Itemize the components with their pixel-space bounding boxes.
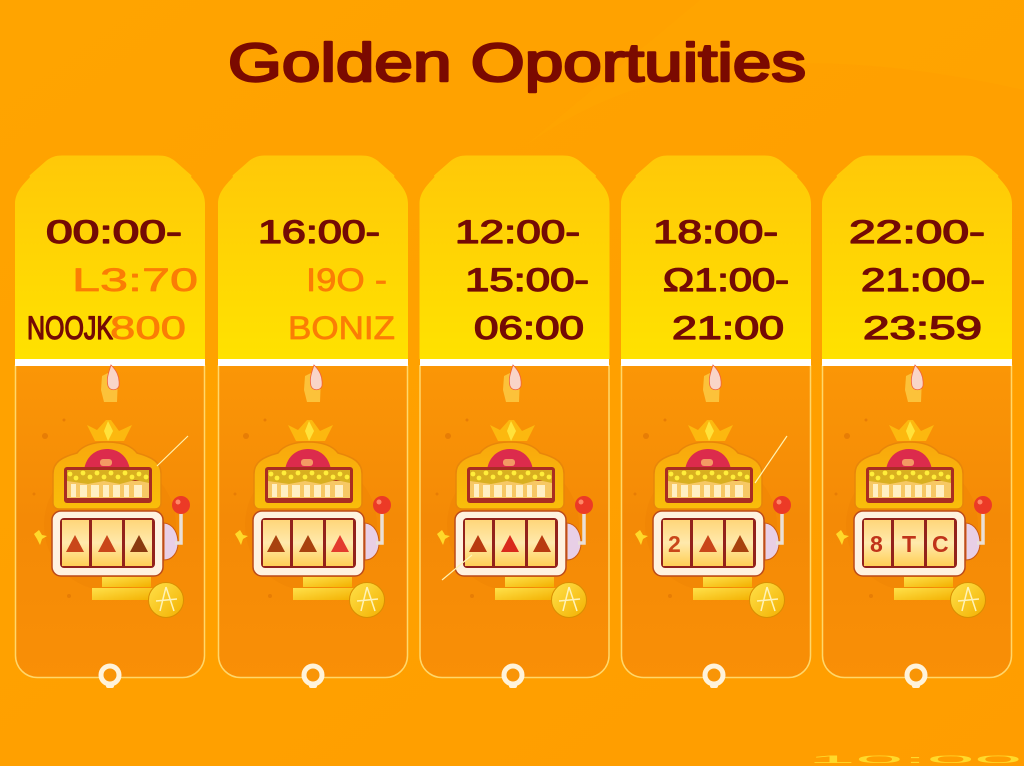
card 1 body: [16, 365, 204, 678]
card 1 ring: [101, 666, 119, 688]
card 2 time text: [258, 214, 395, 346]
card 3 time text: [455, 214, 589, 346]
card 2 time text: BONIZ: [288, 310, 395, 346]
card 4 time text: [653, 214, 789, 346]
card 1 time text: L3:70: [72, 262, 198, 298]
card 4 time text: Ω1:00-: [663, 262, 789, 298]
card 5 slot machine: T: [902, 531, 916, 557]
card 5 time text: 22:00-: [849, 214, 985, 250]
card 3 time text: 15:00-: [465, 262, 589, 298]
card 2 header: [218, 156, 408, 359]
card 3 time text: 12:00-: [455, 214, 580, 250]
card 3 header: [420, 156, 610, 359]
card 2 slot machine: [234, 418, 391, 618]
title: Golden Oportuities: [228, 33, 806, 93]
card 4 slot machine: 2: [668, 531, 681, 557]
card 2 time text: I9O -: [306, 262, 387, 298]
card 5 time text: [849, 214, 985, 346]
card 5 slot machine: C: [932, 531, 949, 557]
panel: time slot 4: [621, 156, 811, 688]
card 1 slot machine: [32, 418, 190, 618]
card 5 slot machine: 8: [870, 531, 883, 557]
card 5 gem: [905, 365, 923, 402]
card 3 body: [420, 365, 609, 678]
card 3 ring: [504, 666, 522, 688]
card 4 time text: 21:00: [672, 310, 784, 346]
card 4 slot machine: [634, 418, 791, 618]
card 2 ring: [304, 666, 322, 688]
card 3 divider: [420, 359, 609, 366]
card 1 header: [15, 156, 205, 359]
panel: time slot 2: [218, 156, 408, 688]
footer text: 10:00: [808, 754, 1022, 766]
card 5 divider: [822, 359, 1012, 366]
card 2 divider: [218, 359, 408, 366]
card 1 time text: 800: [110, 310, 186, 346]
panel: time slot 1: [15, 156, 205, 688]
card 3 gem: [503, 365, 521, 402]
panel: time slot 5: [822, 156, 1012, 688]
card 2 gem: [304, 365, 322, 402]
card 5 header: [822, 156, 1012, 359]
panel: time slot 3: [420, 156, 610, 688]
card 5 time text: 21:00-: [861, 262, 985, 298]
card 5 body: [822, 365, 1012, 678]
card 4 ring: [705, 666, 723, 688]
card 4 header: [621, 156, 811, 359]
card 5 time text: 23:59: [863, 310, 982, 346]
card 2 time text: 16:00-: [258, 214, 380, 250]
card 4 body: [622, 365, 810, 678]
card 1 time text: NOOJK: [27, 310, 113, 346]
card 1 gem: [101, 365, 119, 402]
card 1 divider: [15, 359, 205, 366]
card 2 body: [218, 365, 408, 678]
card 4 divider: [621, 359, 811, 366]
card 4 time text: 18:00-: [653, 214, 778, 250]
card 5 slot machine: [834, 418, 992, 618]
card 5 ring: [907, 666, 925, 688]
card 3 slot machine: [436, 418, 593, 618]
card 1 time text: [27, 214, 198, 346]
card 4 gem: [703, 365, 721, 402]
card 1 time text: 00:00-: [46, 214, 182, 250]
card 3 time text: 06:00: [474, 310, 584, 346]
